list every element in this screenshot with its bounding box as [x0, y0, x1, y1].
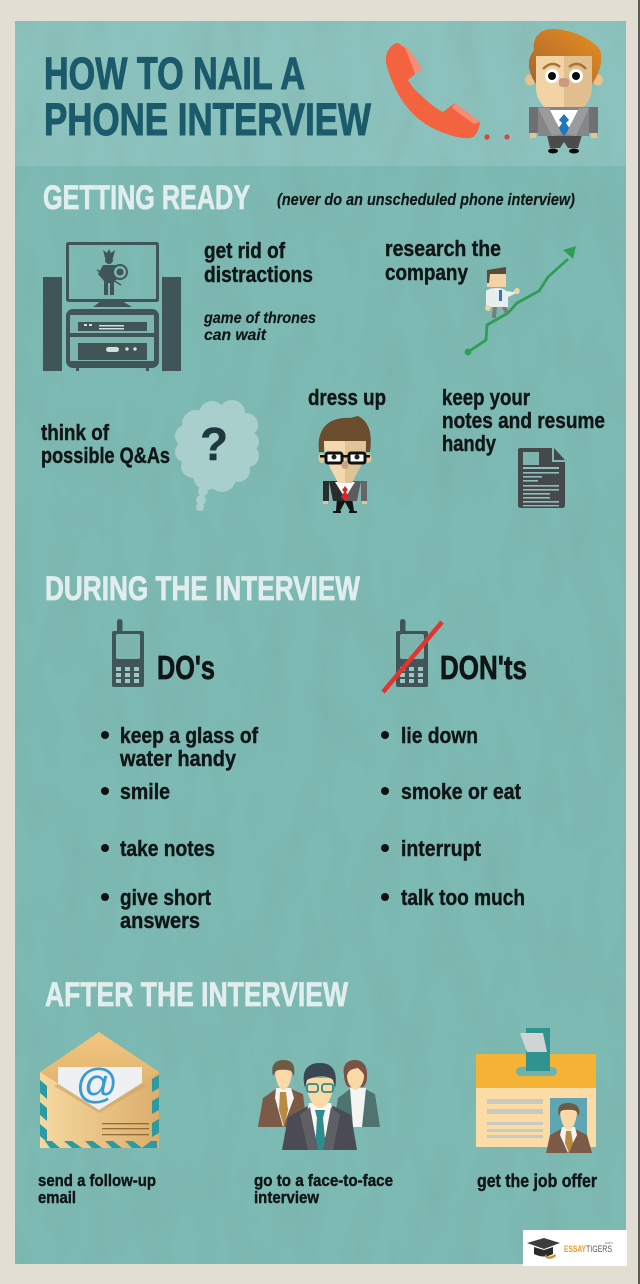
heading: getting ready: GETTING READY [43, 179, 250, 217]
list: do's: take notes [120, 836, 215, 861]
note: never do an unscheduled phone interview: (never do an unscheduled phone interview) [277, 190, 575, 209]
header band [15, 21, 626, 166]
text: keep your notes and resume handy: handy [442, 431, 497, 456]
logo: essaytigers: TIGERS [586, 1244, 612, 1255]
icon: crossed-out mobile phone (don'ts) [383, 619, 442, 692]
text: keep your notes and resume handy: notes and resume [442, 408, 605, 433]
icon: man climbing green growth arrow [465, 246, 576, 355]
text: get rid of distractions [204, 238, 313, 287]
heading: do's: DO's [157, 649, 215, 686]
icon: thought cloud with question mark: ? [200, 418, 228, 470]
list: do's [101, 723, 259, 933]
icon: thought cloud with question mark [175, 400, 259, 511]
text: research the company [385, 236, 501, 285]
heading: after the interview: AFTER THE INTERVIEW [45, 976, 349, 1014]
icon: mobile phone (do's) [112, 619, 144, 687]
list: don'ts: interrupt [401, 836, 482, 861]
text: get the job offer: get the job offer [477, 1171, 597, 1191]
text: game of thrones can wait: game of thrones [203, 310, 316, 327]
text: get rid of distractions: distractions [204, 262, 313, 287]
text: game of thrones can wait [203, 310, 316, 344]
text: send a follow-up email [38, 1171, 156, 1207]
title: PHONE INTERVIEW [44, 94, 371, 145]
icon: three interviewers [258, 1060, 380, 1150]
text: think of possible Q&As: possible Q&As [41, 443, 170, 468]
icon: red telephone handset [386, 43, 510, 140]
logo: essaytigers: .com [604, 1240, 613, 1245]
text: keep your notes and resume handy [442, 385, 605, 456]
title [44, 48, 371, 145]
icon: tv with warrior on screen [43, 244, 181, 371]
list: don'ts [381, 723, 525, 910]
list: don'ts: lie down [401, 723, 478, 748]
logo: essaytigers [523, 1230, 627, 1266]
list: do's: smile [120, 779, 170, 804]
title: HOW TO NAIL A [44, 48, 305, 99]
text: dress up: dress up [308, 385, 386, 410]
list: do's: answers [120, 908, 200, 933]
text: send a follow-up email: email [38, 1188, 76, 1207]
text: think of possible Q&As [41, 420, 170, 468]
text: game of thrones can wait: can wait [204, 327, 267, 344]
text: go to a face-to-face interview: go to a face-to-face [254, 1171, 393, 1190]
text: research the company: research the [385, 236, 501, 261]
list: don'ts: talk too much [401, 885, 525, 910]
list: do's: give short [120, 885, 212, 910]
text: keep your notes and resume handy: keep your [442, 385, 530, 410]
text: go to a face-to-face interview [254, 1171, 393, 1207]
logo: essaytigers: ESSAY [564, 1244, 586, 1255]
icon: airmail envelope with at sign: @ [76, 1060, 118, 1107]
list: do's: keep a glass of [120, 723, 259, 748]
list: don'ts: smoke or eat [401, 779, 522, 804]
text: research the company: company [385, 260, 469, 285]
icon: airmail envelope with at sign [40, 1032, 159, 1148]
text: send a follow-up email: send a follow-up [38, 1171, 156, 1190]
list: do's: water handy [119, 746, 237, 771]
text: think of possible Q&As: think of [41, 420, 110, 445]
icon: id badge job offer [476, 1028, 596, 1153]
icon: businessman with tie [525, 29, 603, 154]
icon: resume document [518, 448, 565, 508]
text: get rid of distractions: get rid of [204, 238, 286, 263]
icon: man in glasses and suit [318, 416, 372, 513]
heading: during the interview: DURING THE INTERVIEW [45, 570, 361, 608]
heading: don'ts: DON'ts [440, 649, 527, 686]
text: go to a face-to-face interview: interview [254, 1188, 320, 1207]
